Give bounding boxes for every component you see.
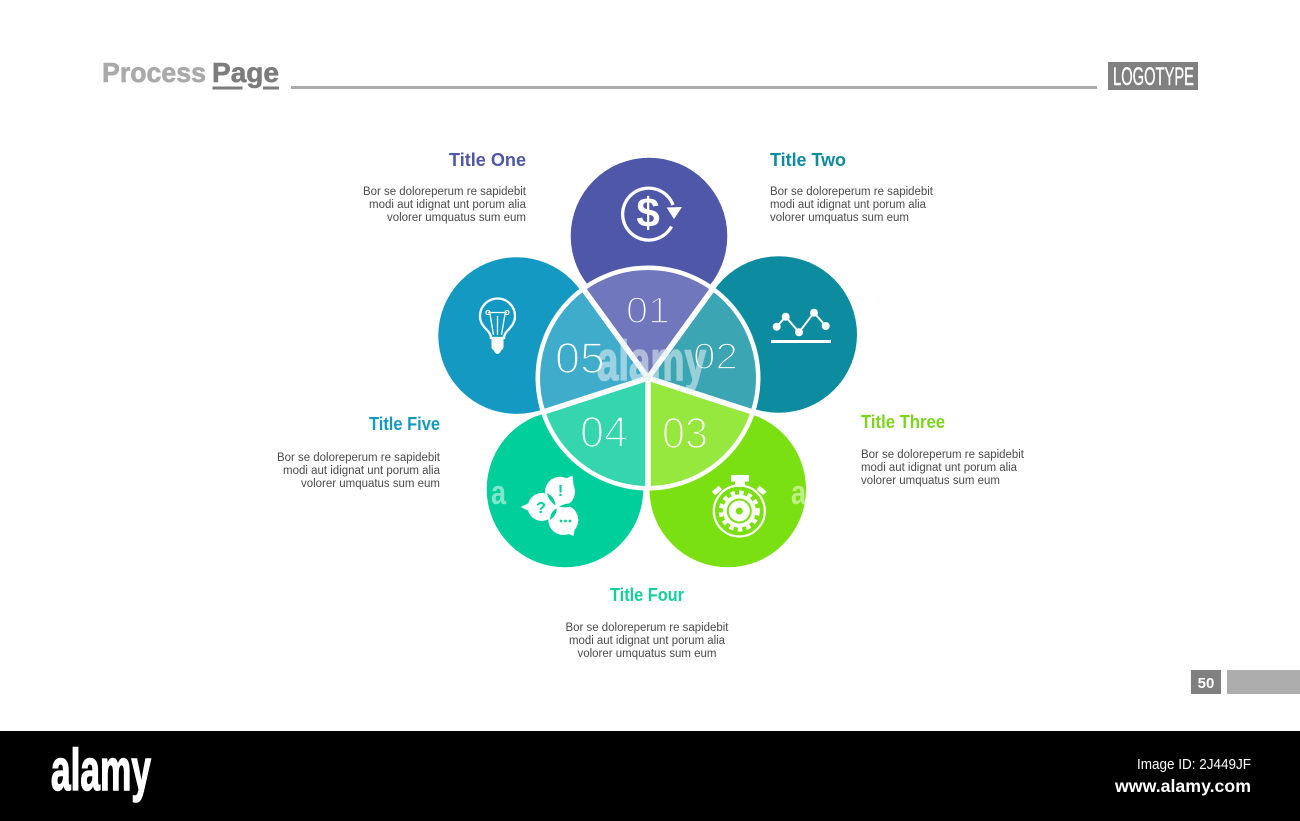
icon: light bulb — [480, 298, 515, 354]
icon: dollar cycle: $ — [636, 189, 660, 236]
icon: dollar cycle — [623, 188, 682, 240]
text block: Title Four: modi aut idignat unt porum alia — [569, 635, 726, 647]
text block: Title Four: volorer umquatus sum eum — [578, 648, 716, 660]
number 04: 04 — [580, 408, 628, 457]
petal 2 — [700, 256, 857, 413]
text block: Title One: modi aut idignat unt porum alia — [369, 199, 527, 211]
watermark: alamy centre: alamy — [597, 329, 706, 392]
text block: Title Four: Bor se doloreperum re sapidebit — [566, 622, 729, 634]
petal 4 — [487, 411, 643, 567]
number 02: 02 — [693, 336, 738, 377]
icon: line chart — [771, 309, 831, 343]
title: Process Page: Page — [212, 57, 279, 88]
text block: Title Two: Title Two — [770, 150, 846, 170]
footer band — [0, 731, 1300, 821]
sector 01 — [584, 270, 712, 378]
text block: Title Four — [566, 585, 729, 660]
watermark: left letter: a — [491, 474, 507, 512]
sector 05 — [540, 291, 648, 411]
text block: Title Three — [861, 412, 1025, 487]
logotype badge: LOGOTYPE — [1113, 63, 1194, 91]
petal 3 — [649, 411, 806, 567]
text block: Title Three: Bor se doloreperum re sapidebit — [861, 449, 1025, 461]
sector 02 — [648, 291, 756, 411]
petal 1 — [571, 158, 727, 314]
watermark: right letter: a — [791, 474, 807, 512]
icon: speech bubbles — [521, 476, 578, 536]
page number: 50 — [1198, 675, 1214, 692]
image id: Image ID: 2J449JF — [1137, 756, 1251, 773]
sector 04 — [545, 378, 648, 486]
text block: Title Two: volorer umquatus sum eum — [770, 212, 909, 224]
text block: Title One: Title One — [449, 150, 526, 170]
logotype badge — [1108, 62, 1198, 91]
text block: Title Two: Bor se doloreperum re sapidebit — [770, 186, 934, 198]
petal 5 — [438, 257, 595, 414]
text block: Title Three: Title Three — [861, 412, 945, 432]
icon: speech bubbles: ! — [558, 483, 563, 500]
page number — [1191, 670, 1300, 694]
footer logo: alamy — [51, 738, 151, 803]
text block: Title One: volorer umquatus sum eum — [387, 212, 526, 224]
text block: Title Five: Bor se doloreperum re sapidebit — [277, 452, 441, 464]
text block: Title Two: modi aut idignat unt porum alia — [770, 199, 927, 211]
petal diagram — [438, 158, 857, 567]
text block: Title Five: modi aut idignat unt porum alia — [283, 465, 441, 477]
text block: Title Three: modi aut idignat unt porum alia — [861, 462, 1018, 474]
sector 03 — [648, 378, 751, 486]
text block: Title Five: Title Five — [369, 414, 440, 434]
title: Process Page: Process — [102, 57, 206, 88]
text block: Title One — [363, 150, 527, 224]
number 03: 03 — [662, 409, 708, 458]
text block: Title Five — [277, 414, 441, 490]
icon: speech bubbles: ? — [536, 500, 546, 517]
text block: Title Five: volorer umquatus sum eum — [301, 478, 440, 490]
title: Process Page — [102, 57, 279, 90]
text block: Title One: Bor se doloreperum re sapidebit — [363, 186, 527, 198]
number 01: 01 — [626, 290, 670, 331]
icon: stopwatch gear — [712, 475, 767, 536]
text block: Title Two — [770, 150, 934, 224]
text block: Title Four: Title Four — [610, 585, 684, 605]
header — [102, 57, 1198, 91]
number 05: 05 — [555, 334, 605, 383]
text block: Title Three: volorer umquatus sum eum — [861, 475, 1000, 487]
website: www.alamy.com — [1114, 776, 1251, 796]
